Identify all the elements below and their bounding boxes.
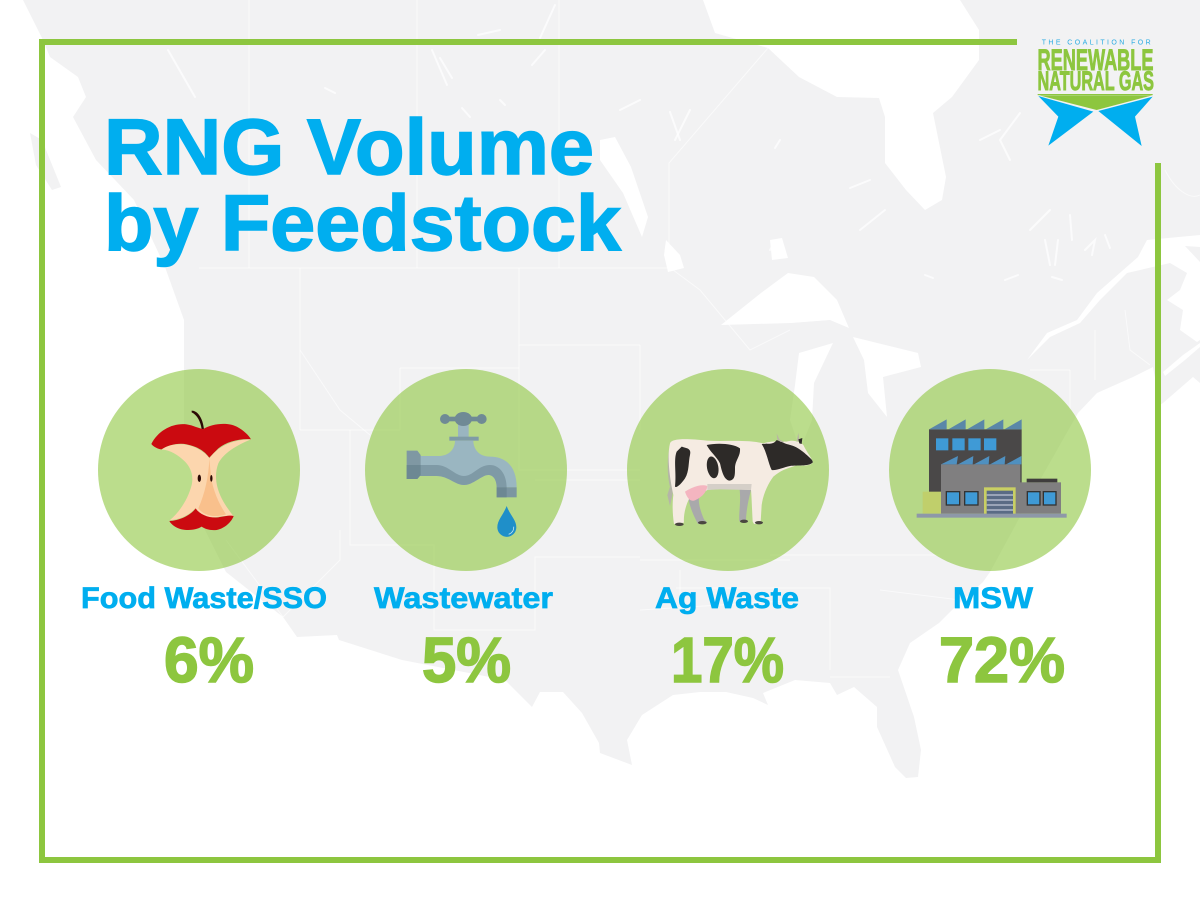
province and state borders — [199, 0, 1200, 677]
icon: dairy cow — [667, 433, 813, 526]
value: 5% — [422, 624, 511, 696]
circle background — [889, 369, 1091, 571]
panel: MSW — [889, 369, 1091, 696]
circle background — [365, 369, 567, 571]
icon: dripping faucet — [407, 412, 517, 537]
title — [104, 102, 622, 267]
St Lawrence river and gulf — [1027, 235, 1200, 360]
value: 72% — [939, 624, 1065, 696]
icon: factory — [917, 419, 1067, 518]
title: by Feedstock — [104, 178, 622, 267]
value: 6% — [164, 624, 254, 696]
icon: apple core — [151, 411, 251, 530]
logo: The Coalition for Renewable Natural Gas — [1038, 40, 1154, 146]
label: MSW — [953, 582, 1034, 615]
circle background — [98, 369, 300, 571]
panel: Food Waste/SSO — [81, 369, 327, 696]
label: Ag Waste — [655, 582, 799, 615]
value: 17% — [671, 624, 784, 696]
lakes and rivers — [168, 5, 1110, 280]
logo: The Coalition for Renewable Natural Gas: THE COALITION FOR — [1042, 40, 1151, 47]
circle background — [627, 369, 829, 571]
panel: Wastewater — [365, 369, 567, 696]
Great Lakes — [600, 137, 921, 450]
label: Wastewater — [374, 582, 553, 615]
Hudson Bay and James Bay — [703, 0, 979, 210]
label: Food Waste/SSO — [81, 582, 327, 615]
panel: Ag Waste — [627, 369, 829, 696]
title: RNG Volume — [104, 102, 594, 191]
